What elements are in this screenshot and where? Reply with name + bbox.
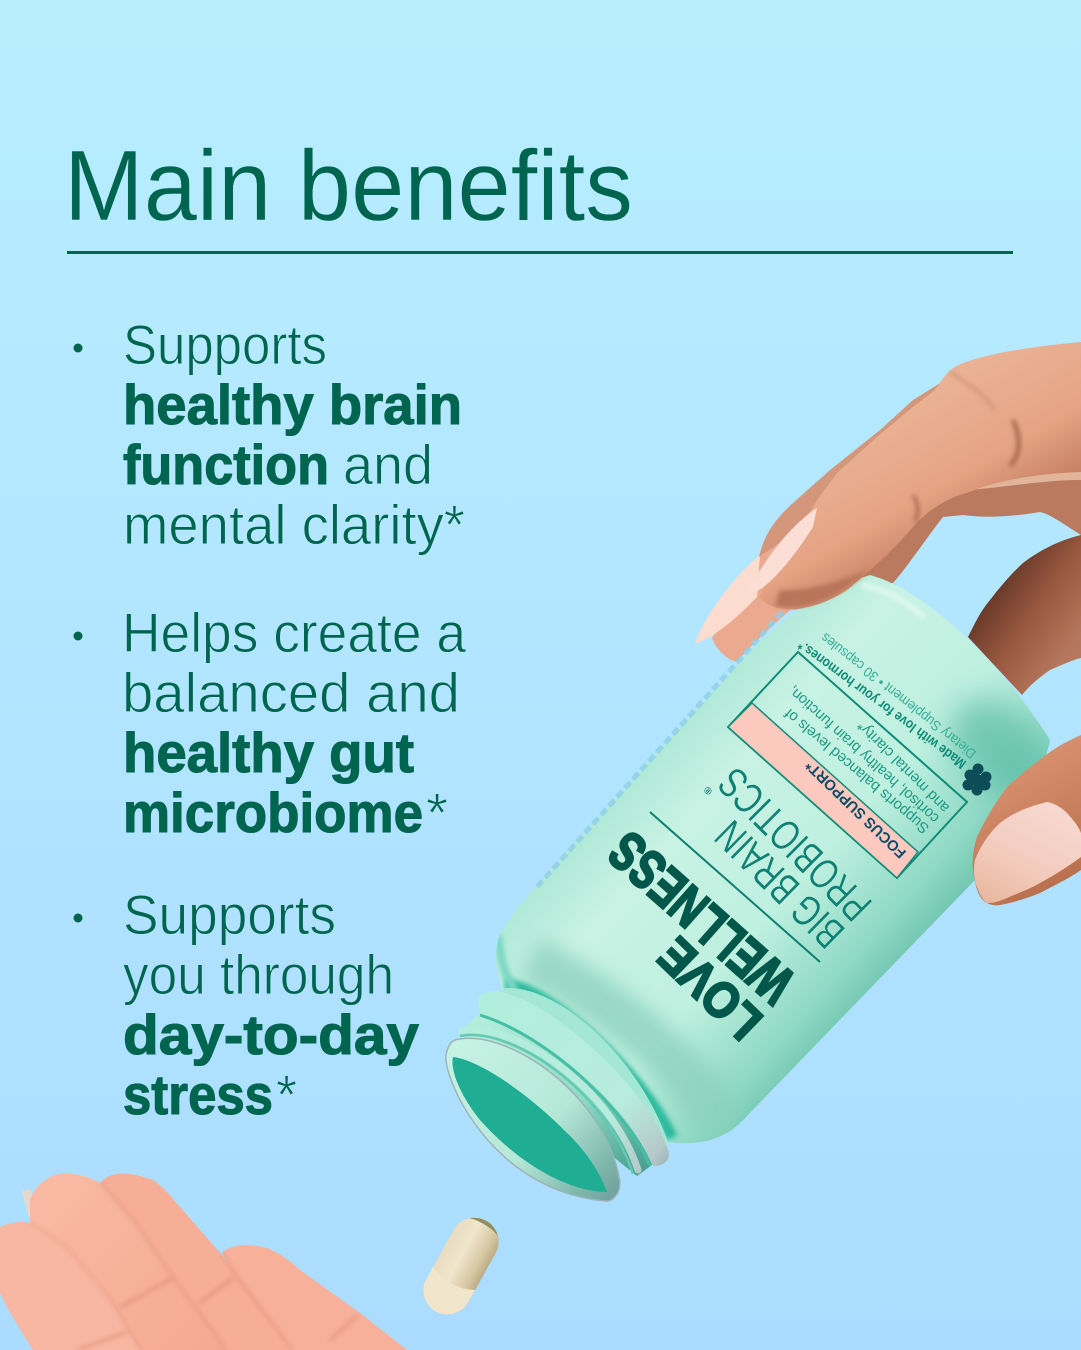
text: you through xyxy=(123,943,394,1006)
capsule xyxy=(415,1209,507,1323)
neck and threads xyxy=(459,988,669,1176)
text: stress xyxy=(123,1063,273,1126)
band text: FOCUS SUPPORT* xyxy=(802,757,910,861)
side label print xyxy=(536,612,782,888)
benefit box xyxy=(728,652,967,878)
text: healthy brain xyxy=(123,373,462,436)
title rule xyxy=(67,251,1013,254)
lower hand xyxy=(0,1173,407,1350)
text: * xyxy=(426,781,448,844)
body shading xyxy=(498,585,1069,1138)
skin fold xyxy=(965,465,1081,490)
title: Main benefits xyxy=(64,130,633,242)
text: day-to-day xyxy=(123,1003,419,1066)
thumb xyxy=(973,735,1081,905)
thumb nail xyxy=(974,802,1081,903)
text: Helps create a xyxy=(122,601,467,664)
benefit 3 xyxy=(74,883,419,1126)
clover mark xyxy=(962,764,992,796)
text: mental clarity* xyxy=(123,493,465,556)
product name xyxy=(702,758,881,957)
logo: love wellness: WELLNESS xyxy=(597,820,806,1015)
little finger xyxy=(222,1245,407,1350)
logo: love wellness xyxy=(597,820,806,1050)
text: microbiome xyxy=(123,781,423,844)
finger creases xyxy=(30,1183,358,1350)
text: Supports xyxy=(123,313,327,376)
text: Supports xyxy=(123,883,336,946)
index finger xyxy=(0,1222,140,1350)
middle fingernail xyxy=(695,555,760,643)
benefit 2 xyxy=(74,601,467,844)
bullet xyxy=(74,632,82,640)
bottle body xyxy=(496,575,1050,1143)
text: * xyxy=(276,1063,297,1126)
box text: Supports balanced levels of xyxy=(781,704,933,837)
benefit 1 xyxy=(74,313,465,556)
product name: BIG BRAIN xyxy=(706,811,854,957)
middle finger xyxy=(30,1173,227,1350)
text: healthy gut xyxy=(123,721,414,784)
upper hand behind the bottle xyxy=(695,465,1081,695)
index finger xyxy=(759,342,1081,610)
capsule tip shading xyxy=(468,1213,502,1236)
ring finger xyxy=(100,1174,293,1350)
bullet xyxy=(74,344,82,352)
dark ring finger xyxy=(968,535,1081,695)
pink band xyxy=(728,703,918,878)
bullet xyxy=(74,914,82,922)
product name: ® xyxy=(702,783,715,797)
text xyxy=(122,601,467,844)
upper hand in front of the bottle xyxy=(747,342,1081,610)
mouth lip xyxy=(446,1038,620,1201)
capsule body xyxy=(415,1209,507,1323)
product name: PROBIOTICS xyxy=(709,758,881,930)
nail xyxy=(22,1189,36,1222)
capsule seam xyxy=(415,1267,475,1323)
knuckle creases xyxy=(913,372,1019,522)
tagline: Dietary Supplement • 30 capsules xyxy=(817,630,979,762)
text xyxy=(123,883,419,1126)
logo rule xyxy=(650,812,820,962)
tagline: Made with love for your hormones.* xyxy=(794,637,969,772)
back fingers xyxy=(850,470,1081,592)
back finger sliver xyxy=(759,380,945,557)
box text: and mental clarity* xyxy=(854,717,953,816)
box text: cortisol, healthy brain function, xyxy=(785,682,943,827)
bottle xyxy=(446,575,1069,1201)
text: function xyxy=(123,433,329,496)
fingertip shading xyxy=(775,568,872,607)
text xyxy=(123,313,465,556)
logo: love wellness: LOVE xyxy=(647,927,773,1050)
text: balanced and xyxy=(122,661,460,724)
text: and xyxy=(343,433,433,496)
mouth opening xyxy=(452,1057,607,1192)
middle finger xyxy=(712,500,840,662)
thumb skin xyxy=(973,735,1081,905)
index fingernail xyxy=(747,508,817,595)
